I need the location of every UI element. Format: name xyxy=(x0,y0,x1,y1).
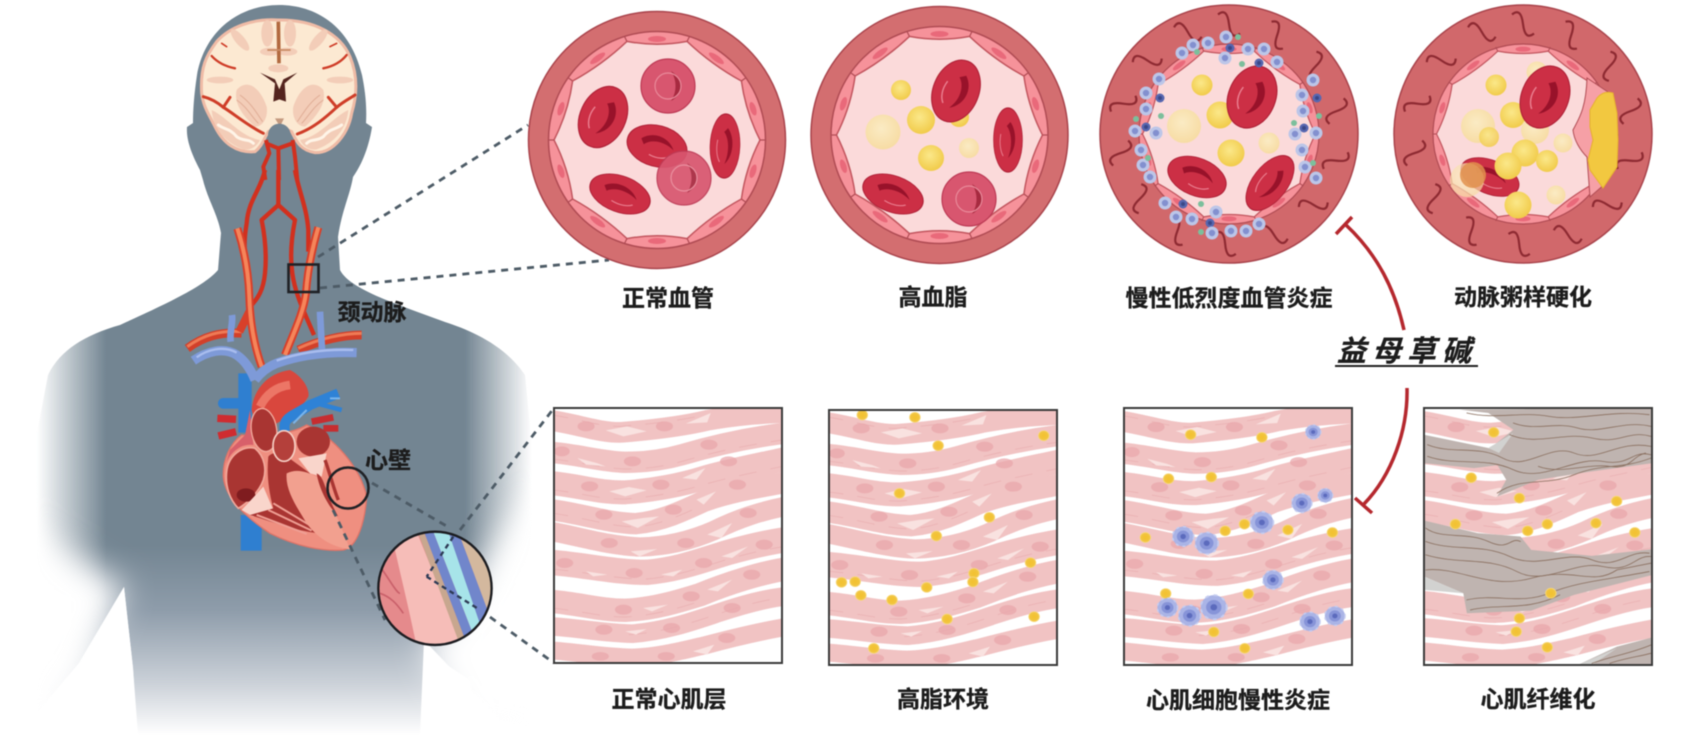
panel: high blood lipid vessel xyxy=(811,6,1068,264)
drug name: 益母草碱 xyxy=(1337,336,1477,368)
inhibition arrow: bottom xyxy=(1355,388,1407,513)
neck arteries and veins xyxy=(187,170,362,380)
label: normal myocardium: 正常心肌层 xyxy=(612,686,726,712)
label: myocardial fibrosis: 心肌纤维化 xyxy=(1480,686,1596,712)
label: high-fat environment: 高脂环境 xyxy=(897,686,989,712)
label: atherosclerosis: 动脉粥样硬化 xyxy=(1454,284,1592,310)
label: carotid: 颈动脉 xyxy=(338,299,406,325)
immune cells xyxy=(1128,30,1322,240)
label: heart wall: 心壁 xyxy=(365,447,411,473)
panel: chronic low-grade vascular inflammation xyxy=(1100,5,1358,263)
panel: myocardial chronic inflammation xyxy=(1120,408,1356,665)
human body silhouette xyxy=(40,4,528,726)
panel: normal blood vessel xyxy=(528,12,786,268)
heart xyxy=(217,370,367,551)
magnified heart wall xyxy=(377,530,500,647)
panel: myocardial fibrosis xyxy=(1420,408,1656,665)
inhibition arrow: top xyxy=(1336,217,1404,330)
label: myocardial inflammation: 心肌细胞慢性炎症 xyxy=(1146,687,1330,713)
heart wall circle xyxy=(328,468,368,508)
label: high blood lipid: 高血脂 xyxy=(898,284,968,310)
panel: high-fat environment xyxy=(825,410,1062,665)
brain cross-section xyxy=(201,20,356,180)
carotid selection box xyxy=(288,264,318,292)
label: chronic inflammation: 慢性低烈度血管炎症 xyxy=(1126,285,1332,311)
label: normal vessel: 正常血管 xyxy=(622,285,714,311)
dotted zoom lines xyxy=(318,125,609,663)
panel: normal myocardium xyxy=(550,408,786,663)
panel: atherosclerosis xyxy=(1394,5,1652,263)
